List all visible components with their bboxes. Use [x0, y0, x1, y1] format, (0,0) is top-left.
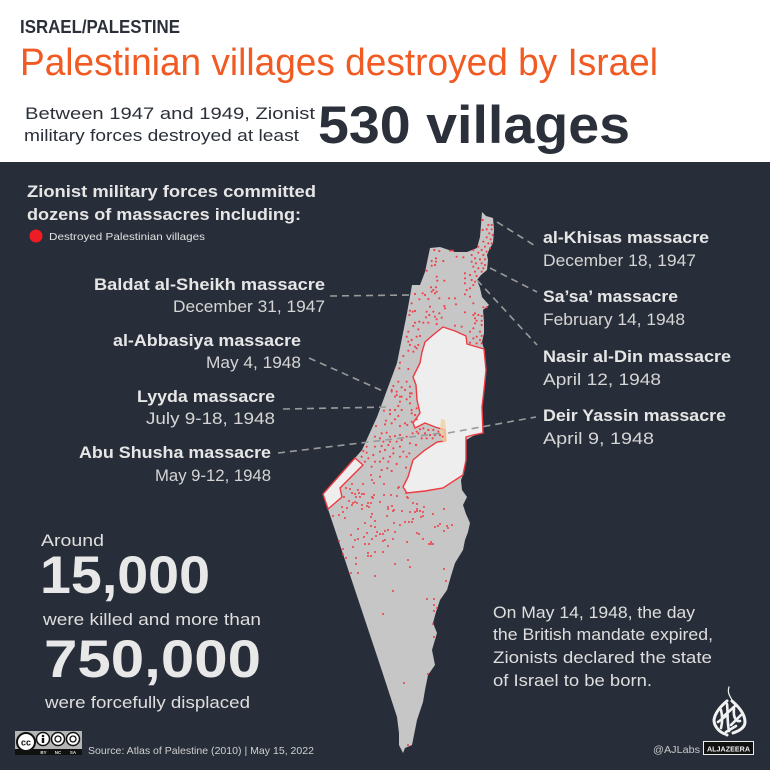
statistics block: were killed and more than: [42, 610, 261, 629]
label: al-Khisas massacre: [543, 229, 709, 270]
headline number: 530 villages: [318, 96, 630, 155]
connector lines: [278, 222, 537, 453]
map: northern village dots: [392, 220, 493, 397]
label: Lyyda massacre: [137, 388, 275, 428]
label: Deir Yassin massacre: Deir Yassin massacre: [543, 407, 726, 425]
icon: Creative Commons badge: cc: [21, 738, 31, 748]
map: [323, 212, 494, 753]
statistics block: 750,000: [44, 630, 261, 689]
paragraph: declaration of state: [493, 603, 713, 690]
label: Deir Yassin massacre: April 9, 1948: [543, 430, 654, 448]
intro text: [24, 104, 315, 145]
map: central village dots: [362, 392, 443, 477]
source line: Source: Atlas of Palestine (2010) | May 15, 2022: [88, 745, 314, 757]
kicker: ISRAEL/PALESTINE: [20, 17, 180, 37]
logo: Al Jazeera emblem: [714, 687, 745, 736]
label: al-Abbasiya massacre: al-Abbasiya massacre: [113, 332, 301, 350]
map: Jerusalem: [440, 419, 447, 443]
label: Nasir al-Din massacre: April 12, 1948: [543, 371, 661, 389]
label: Lyyda massacre: Lyyda massacre: [137, 388, 275, 406]
label: al-Abbasiya massacre: May 4, 1948: [206, 354, 301, 372]
label: al-Khisas massacre: al-Khisas massacre: [543, 229, 709, 247]
paragraph: declaration of state: Zionists declared the state: [493, 648, 712, 667]
label: Abu Shusha massacre: Abu Shusha massacre: [79, 444, 271, 462]
statistics block: Around: [41, 531, 104, 550]
intro text: Between 1947 and 1949, Zionist: [25, 104, 315, 123]
label: Sa'sa' massacre: Sa’sa’ massacre: [543, 288, 678, 306]
icon: Creative Commons badge: [15, 731, 82, 755]
statistics block: were forcefully displaced: [44, 693, 250, 712]
title: Palestinian villages destroyed by Israel: [20, 42, 658, 84]
map: Gaza Strip: [323, 458, 363, 509]
intro text: military forces destroyed at least: [24, 126, 299, 145]
paragraph: declaration of state: the British mandate expired,: [493, 625, 713, 644]
label: Baldat al-Sheikh massacre: Baldat al-Sheikh massacre: [94, 276, 325, 294]
label: al-Abbasiya massacre: [113, 332, 301, 372]
label: Sa'sa' massacre: [543, 288, 685, 329]
label: Baldat al-Sheikh massacre: [94, 276, 325, 316]
statistics block: 15,000: [40, 546, 210, 605]
label: Lyyda massacre: July 9-18, 1948: [146, 410, 275, 428]
massacres heading: [27, 182, 316, 224]
label: al-Khisas massacre: December 18, 1947: [543, 252, 696, 270]
label: Abu Shusha massacre: [79, 444, 271, 485]
map: southern village dots: [333, 475, 452, 745]
label: Nasir al-Din massacre: [543, 348, 731, 389]
label: Nasir al-Din massacre: Nasir al-Din massacre: [543, 348, 731, 366]
map: West Bank: [403, 327, 486, 493]
label: Abu Shusha massacre: May 9-12, 1948: [155, 467, 271, 485]
handle: @AJLabs: [653, 744, 700, 756]
statistics block: [40, 531, 261, 712]
massacres heading: dozens of massacres including:: [27, 205, 301, 224]
icon: Creative Commons badge: NC: [55, 750, 62, 755]
paragraph: declaration of state: of Israel to be born.: [493, 671, 652, 690]
label: Baldat al-Sheikh massacre: December 31, 1947: [173, 298, 325, 316]
label: Sa'sa' massacre: February 14, 1948: [543, 311, 685, 329]
paragraph: declaration of state: On May 14, 1948, the day: [493, 603, 696, 622]
massacres heading: Zionist military forces committed: [27, 182, 316, 201]
icon: Creative Commons badge: BY: [40, 750, 47, 755]
icon: Creative Commons badge: SA: [70, 750, 77, 755]
map: land: [323, 212, 494, 753]
logo: Al Jazeera wordmark: [704, 742, 754, 754]
legend: destroyed villages: Destroyed Palestinian villages: [49, 231, 205, 243]
logo: Al Jazeera wordmark: ALJAZEERA: [707, 744, 751, 754]
label: Deir Yassin massacre: [543, 407, 726, 448]
